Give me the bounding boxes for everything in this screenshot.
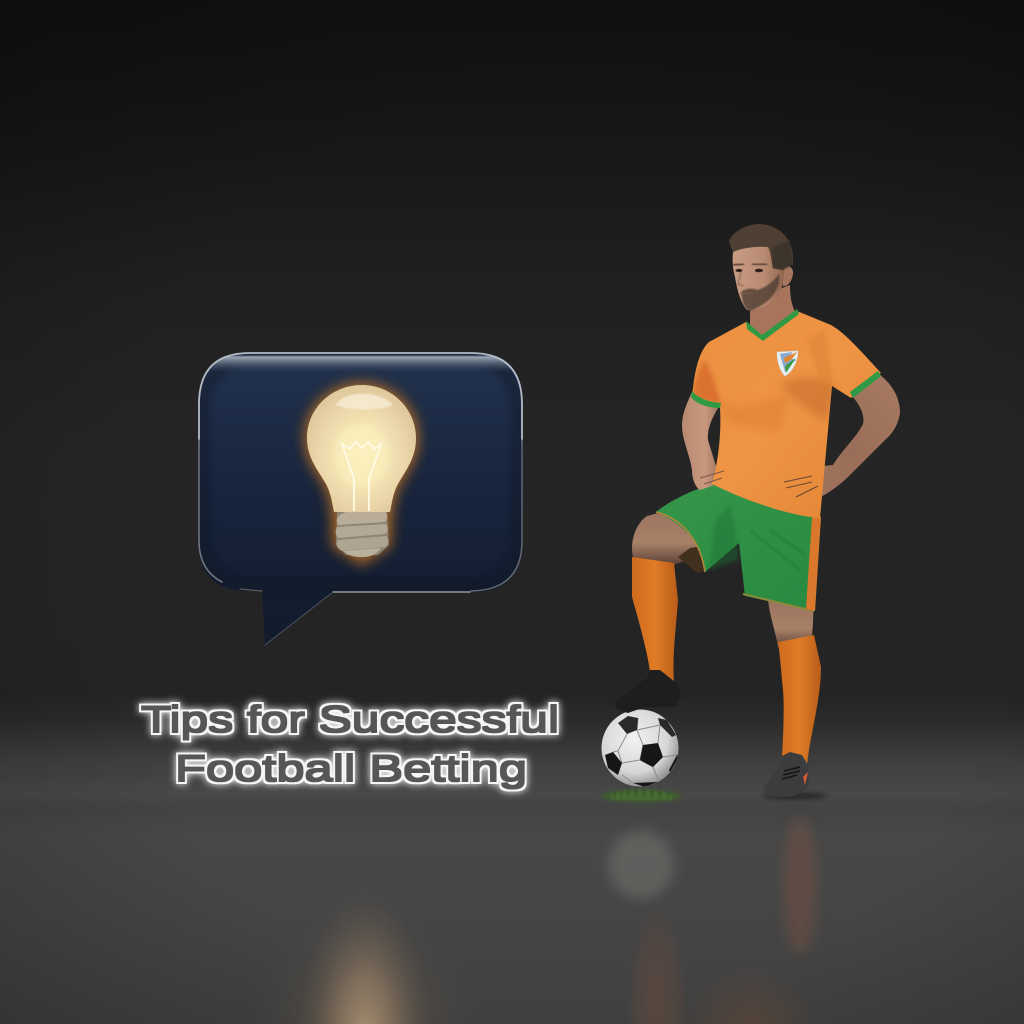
nose and mouth [738, 272, 751, 294]
speech bubble with light bulb [198, 352, 523, 646]
head [729, 224, 793, 311]
ball seams [613, 718, 677, 784]
bulb screw base [336, 512, 389, 557]
standing thigh [768, 600, 813, 648]
shorts [656, 484, 821, 611]
fingers right hand [784, 476, 818, 497]
ear [782, 266, 793, 286]
left arm [682, 392, 728, 490]
raised sock [632, 557, 678, 683]
raised thigh and knee [632, 510, 701, 565]
grass patch [601, 786, 681, 802]
raised boot [614, 670, 681, 713]
floor reflections [240, 817, 820, 1024]
standing boot [763, 752, 809, 797]
bubble body [198, 352, 523, 646]
right arm [782, 373, 900, 503]
left sleeve cuff [691, 391, 721, 408]
bubble rim [199, 353, 522, 645]
fingers left hand [700, 471, 724, 484]
face [733, 240, 784, 310]
neck [750, 285, 798, 342]
soccer ball [602, 710, 679, 787]
collar [746, 309, 799, 341]
crest [777, 351, 798, 376]
light bulb [307, 385, 416, 557]
title line 2: Football Betting [175, 748, 527, 789]
standing sock [778, 635, 821, 765]
beard [741, 274, 779, 311]
shoe contact shadow [763, 792, 827, 800]
bulb halo [307, 385, 416, 562]
jersey [691, 309, 881, 518]
filament [342, 442, 381, 511]
shorts inner lining [678, 545, 708, 573]
bubble edge shading [203, 356, 518, 586]
eyes [736, 269, 763, 272]
title line 1: Tips for Successful [141, 699, 559, 740]
football player [614, 224, 900, 797]
jersey shading [692, 330, 835, 430]
brows [733, 264, 767, 265]
title [141, 699, 559, 789]
ball panels [605, 716, 679, 787]
right sleeve cuff [850, 371, 881, 398]
hair [729, 224, 793, 270]
